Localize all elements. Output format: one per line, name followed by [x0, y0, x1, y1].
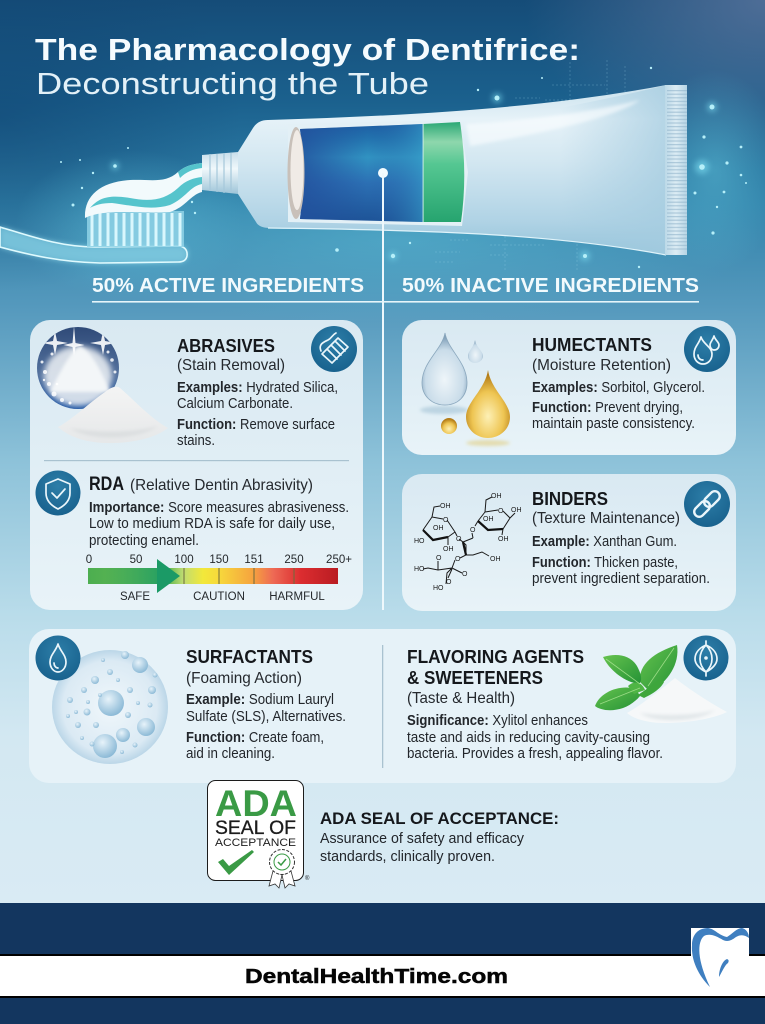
cutaway window: [288, 120, 468, 226]
glowing particles: [60, 67, 747, 268]
RDA scale bar: 100: [174, 554, 194, 566]
molecule diagram: O: [455, 556, 461, 563]
heading: (Moisture Retention): [532, 357, 671, 374]
icon: mint seed: [684, 636, 728, 680]
icon: drops: [684, 326, 730, 372]
ADA seal text: [320, 809, 559, 865]
ADA seal text: Assurance of safety and efficacy: [320, 831, 525, 847]
image: powder pile: [58, 387, 168, 443]
description: Example: Xanthan Gum.: [532, 534, 677, 550]
RDA description: Low to medium RDA is safe for daily use,: [89, 516, 335, 532]
heading: BINDERS: [532, 488, 608, 509]
description: stains.: [177, 433, 215, 449]
ADA seal badge: [208, 780, 310, 888]
RDA heading: RDA: [89, 474, 124, 495]
crimp end: [665, 85, 687, 255]
tube body: [238, 85, 666, 255]
heading: [186, 646, 313, 687]
toothbrush with toothpaste: [0, 163, 202, 263]
molecule diagram: OH: [511, 507, 522, 514]
molecule diagram: OH: [483, 516, 494, 523]
molecule diagram: OH: [491, 493, 502, 500]
RDA scale bar: [86, 554, 352, 603]
title: [35, 33, 580, 101]
description: [532, 534, 710, 587]
description: Sulfate (SLS), Alternatives.: [186, 709, 346, 725]
description: Significance: Xylitol enhances: [407, 713, 588, 729]
molecule diagram: O: [462, 571, 468, 578]
toothpaste tube cutaway: [202, 85, 687, 610]
description: Function: Prevent drying,: [532, 400, 683, 416]
toothpaste swirl: [85, 163, 202, 218]
RDA scale bar: 151: [244, 554, 264, 566]
molecule diagram: OH: [440, 503, 450, 510]
heading: (Taste & Health): [407, 690, 515, 707]
description: [177, 380, 338, 449]
ADA seal badge: ADA: [215, 783, 297, 824]
description: maintain paste consistency.: [532, 416, 695, 432]
description: Examples: Hydrated Silica,: [177, 380, 338, 396]
RDA scale bar: 250+: [326, 554, 352, 566]
icon: toothbrush: [311, 326, 357, 372]
description: [532, 380, 705, 432]
icon: shield: [36, 470, 80, 516]
RDA scale bar: CAUTION: [193, 591, 245, 603]
image: foam sphere: [52, 650, 168, 764]
panel: abrasives and RDA: [30, 320, 363, 610]
molecule diagram: O: [498, 508, 504, 515]
description: Example: Sodium Lauryl: [186, 692, 334, 708]
bristles: [87, 211, 184, 247]
icon: water drop: [36, 636, 80, 680]
section headers: 50% INACTIVE INGREDIENTS: [402, 275, 699, 297]
heading: [532, 334, 671, 374]
title: The Pharmacology of Dentifrice:: [35, 33, 580, 67]
pointer dot and line: [378, 168, 388, 610]
heading: [177, 335, 285, 374]
check mark: [218, 850, 254, 875]
image: crystals: [37, 326, 119, 409]
RDA scale bar: HARMFUL: [269, 591, 325, 603]
description: [186, 692, 346, 762]
description: [407, 713, 663, 762]
molecule diagram: OH: [433, 525, 444, 532]
heading: (Foaming Action): [186, 670, 302, 687]
panel: humectants: [402, 320, 736, 455]
rosette: [269, 850, 295, 888]
panel: binders: [402, 474, 736, 611]
description: taste and aids in reducing cavity-causing: [407, 730, 650, 746]
title: Deconstructing the Tube: [36, 67, 429, 101]
brush handle: [0, 227, 187, 263]
heading: FLAVORING AGENTS: [407, 646, 584, 667]
heading: & SWEETENERS: [407, 667, 543, 688]
image: droplets: [420, 333, 510, 446]
heading: HUMECTANTS: [532, 334, 652, 355]
icon: chain link: [684, 481, 730, 527]
description: Function: Create foam,: [186, 730, 324, 746]
ADA seal badge: ACCEPTANCE: [215, 837, 296, 849]
heading: ABRASIVES: [177, 335, 275, 356]
footer band: [0, 903, 765, 1024]
RDA description: [89, 500, 349, 549]
description: Examples: Sorbitol, Glycerol.: [532, 380, 705, 396]
panel: surfactants and flavoring: [29, 629, 736, 783]
RDA scale bar: 0: [86, 554, 92, 566]
molecule diagram: O: [436, 555, 442, 562]
heading: (Stain Removal): [177, 357, 285, 374]
molecule diagram: HO: [414, 538, 425, 545]
molecule diagram: OH: [490, 556, 500, 563]
ADA seal text: standards, clinically proven.: [320, 849, 495, 865]
molecule diagram: HO: [433, 585, 444, 592]
molecule diagram: OH: [443, 546, 454, 553]
website name: DentalHealthTime.com: [245, 965, 508, 988]
RDA scale bar: SAFE: [120, 591, 150, 603]
ADA seal badge: SEAL OF: [215, 817, 296, 839]
image: mint and sweetener: [595, 645, 727, 723]
section headers: [92, 275, 699, 303]
description: aid in cleaning.: [186, 746, 275, 762]
molecule diagram: HO: [414, 566, 425, 573]
RDA scale bar: 150: [209, 554, 229, 566]
RDA scale bar: 50: [130, 554, 142, 566]
description: prevent ingredient separation.: [532, 571, 710, 587]
section headers: 50% ACTIVE INGREDIENTS: [92, 275, 364, 297]
RDA scale bar: 250: [284, 554, 304, 566]
molecule diagram: O: [443, 517, 449, 524]
logo: tooth: [691, 928, 749, 987]
description: bacteria. Provides a fresh, appealing flavor.: [407, 746, 663, 762]
molecule diagram: [414, 493, 522, 592]
ADA seal badge: ®: [305, 875, 310, 882]
RDA description: protecting enamel.: [89, 533, 199, 549]
molecule diagram: O: [446, 579, 452, 586]
heading: (Texture Maintenance): [532, 510, 680, 527]
faint data grid: [435, 60, 625, 272]
heading: [407, 646, 584, 707]
description: Function: Remove surface: [177, 417, 335, 433]
threaded neck: [202, 152, 238, 194]
ADA seal text: ADA SEAL OF ACCEPTANCE:: [320, 809, 559, 828]
molecule diagram: O: [470, 527, 476, 534]
molecule diagram: OH: [498, 536, 508, 543]
heading: SURFACTANTS: [186, 646, 313, 667]
RDA heading: [89, 474, 313, 495]
description: Function: Thicken paste,: [532, 555, 678, 571]
description: Calcium Carbonate.: [177, 396, 293, 412]
arrow: [157, 559, 180, 593]
RDA heading: (Relative Dentin Abrasivity): [130, 477, 313, 494]
heading: [532, 488, 680, 527]
molecule diagram: O: [456, 536, 462, 543]
RDA description: Importance: Score measures abrasiveness.: [89, 500, 349, 516]
